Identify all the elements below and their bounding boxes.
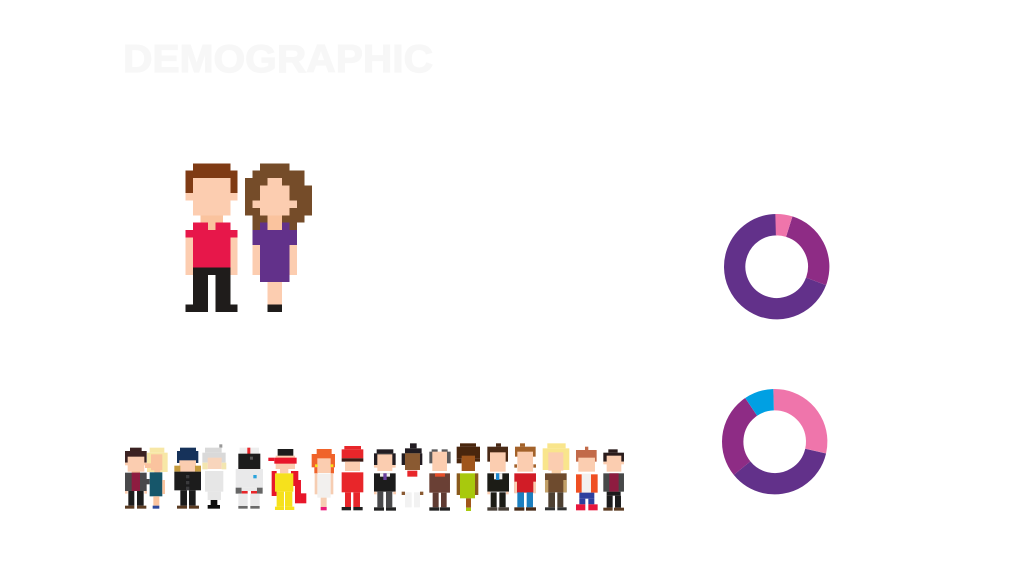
- character: man in grey jacket and maroon shirt: [603, 449, 624, 511]
- title: DEMOGRAPHIC: [123, 38, 433, 81]
- character: man in black suit and purple tie: [374, 449, 396, 511]
- donut chart: bottom: [716, 383, 834, 501]
- icon: large pixel woman: [245, 163, 312, 312]
- character: man in black suit and blue tie: [487, 443, 509, 511]
- character: woman with afro in green dress: [457, 443, 480, 511]
- character: blonde woman in teal dress: [144, 448, 168, 509]
- character: figure in red hat and suit: [342, 446, 363, 510]
- character: man in orange checked vest: [576, 447, 598, 510]
- donut chart: top: [723, 213, 831, 321]
- character: dark-haired man in jacket: [125, 448, 147, 509]
- character: astronaut: [236, 448, 263, 509]
- row of small pixel characters: [125, 443, 624, 511]
- icon: large pixel man: [186, 163, 238, 312]
- character: man in navy hat and coat: [174, 448, 201, 509]
- character: man in red shirt and jeans: [514, 443, 536, 511]
- character: woman with bun in white outfit: [402, 443, 423, 507]
- character: red-haired woman in white dress: [312, 449, 335, 510]
- character: white-haired scientist: [202, 444, 226, 509]
- character: caped superhero: [268, 449, 306, 510]
- character: balding man in brown suit: [429, 449, 451, 511]
- character: long-haired blonde figure: [543, 443, 569, 510]
